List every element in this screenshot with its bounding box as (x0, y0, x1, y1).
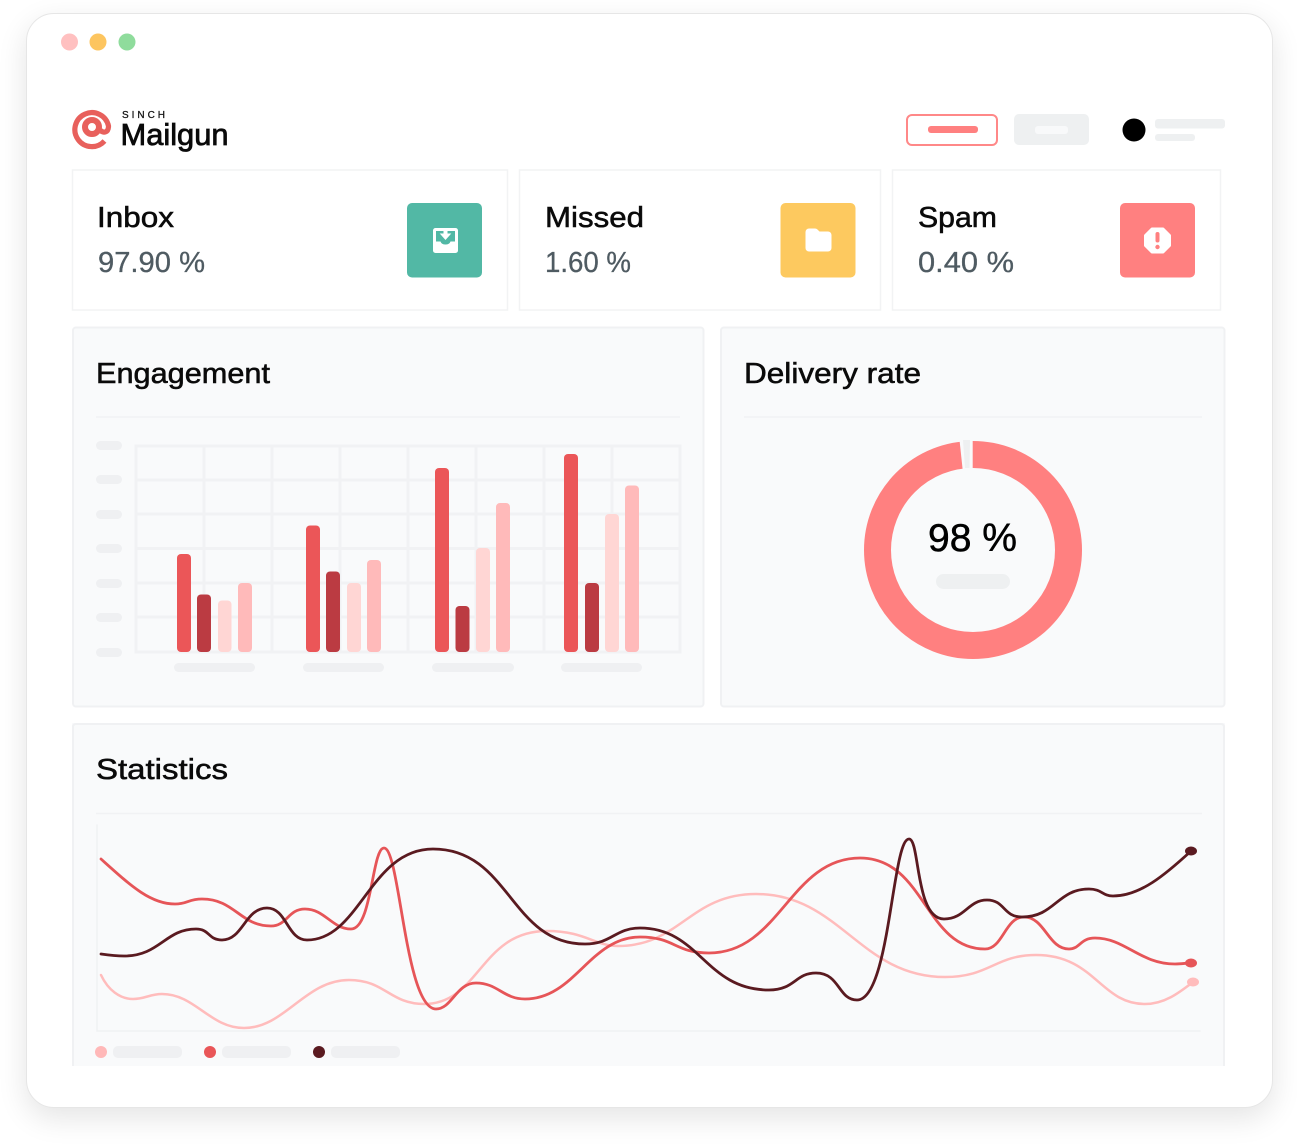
y axis label placeholders (96, 441, 122, 657)
donut value: 98 % (928, 517, 1017, 560)
user avatar and name placeholder (1122, 118, 1225, 142)
chart grid (136, 446, 680, 652)
red series (101, 848, 1191, 1009)
Inbox heading: Inbox (97, 202, 175, 234)
dark series (101, 839, 1191, 1000)
Engagement heading: Engagement (96, 358, 270, 390)
panel: Engagement (73, 328, 704, 706)
logo wordmark: Mailgun (120, 117, 228, 152)
bar chart (96, 441, 680, 672)
icon: at sign (75, 113, 108, 147)
logo: Sinch Mailgun (75, 110, 228, 152)
donut chart (878, 438, 1068, 646)
icon: inbox tray (407, 203, 482, 278)
Spam heading: Spam (918, 202, 997, 234)
panel: Delivery rate (721, 328, 1224, 706)
Missed value: 1.60 % (545, 247, 631, 279)
panel: Missed (520, 170, 880, 310)
logo small text: SINCH (122, 110, 165, 121)
line chart (97, 825, 1200, 1031)
Missed heading: Missed (545, 202, 644, 234)
window controls (61, 34, 136, 50)
panel: Inbox (72, 170, 508, 310)
icon: warning octagon (1120, 203, 1195, 278)
icon: folder (780, 203, 856, 278)
bars: group 4 (564, 454, 639, 652)
bars: group 1 (177, 554, 252, 652)
donut caption placeholder (936, 574, 1010, 589)
Delivery rate heading: Delivery rate (744, 358, 921, 390)
panel: Statistics (72, 723, 1225, 1066)
light series (101, 894, 1193, 1028)
bars: group 2 (306, 526, 381, 652)
Statistics heading: Statistics (96, 754, 228, 786)
bars: group 3 (435, 468, 510, 652)
series end markers (1185, 846, 1199, 986)
legend (95, 1046, 400, 1058)
header buttons (907, 114, 1089, 145)
Inbox value: 97.90 % (98, 247, 205, 279)
Spam value: 0.40 % (918, 247, 1014, 279)
x axis label placeholders (174, 663, 642, 672)
panel: Spam (892, 170, 1220, 310)
